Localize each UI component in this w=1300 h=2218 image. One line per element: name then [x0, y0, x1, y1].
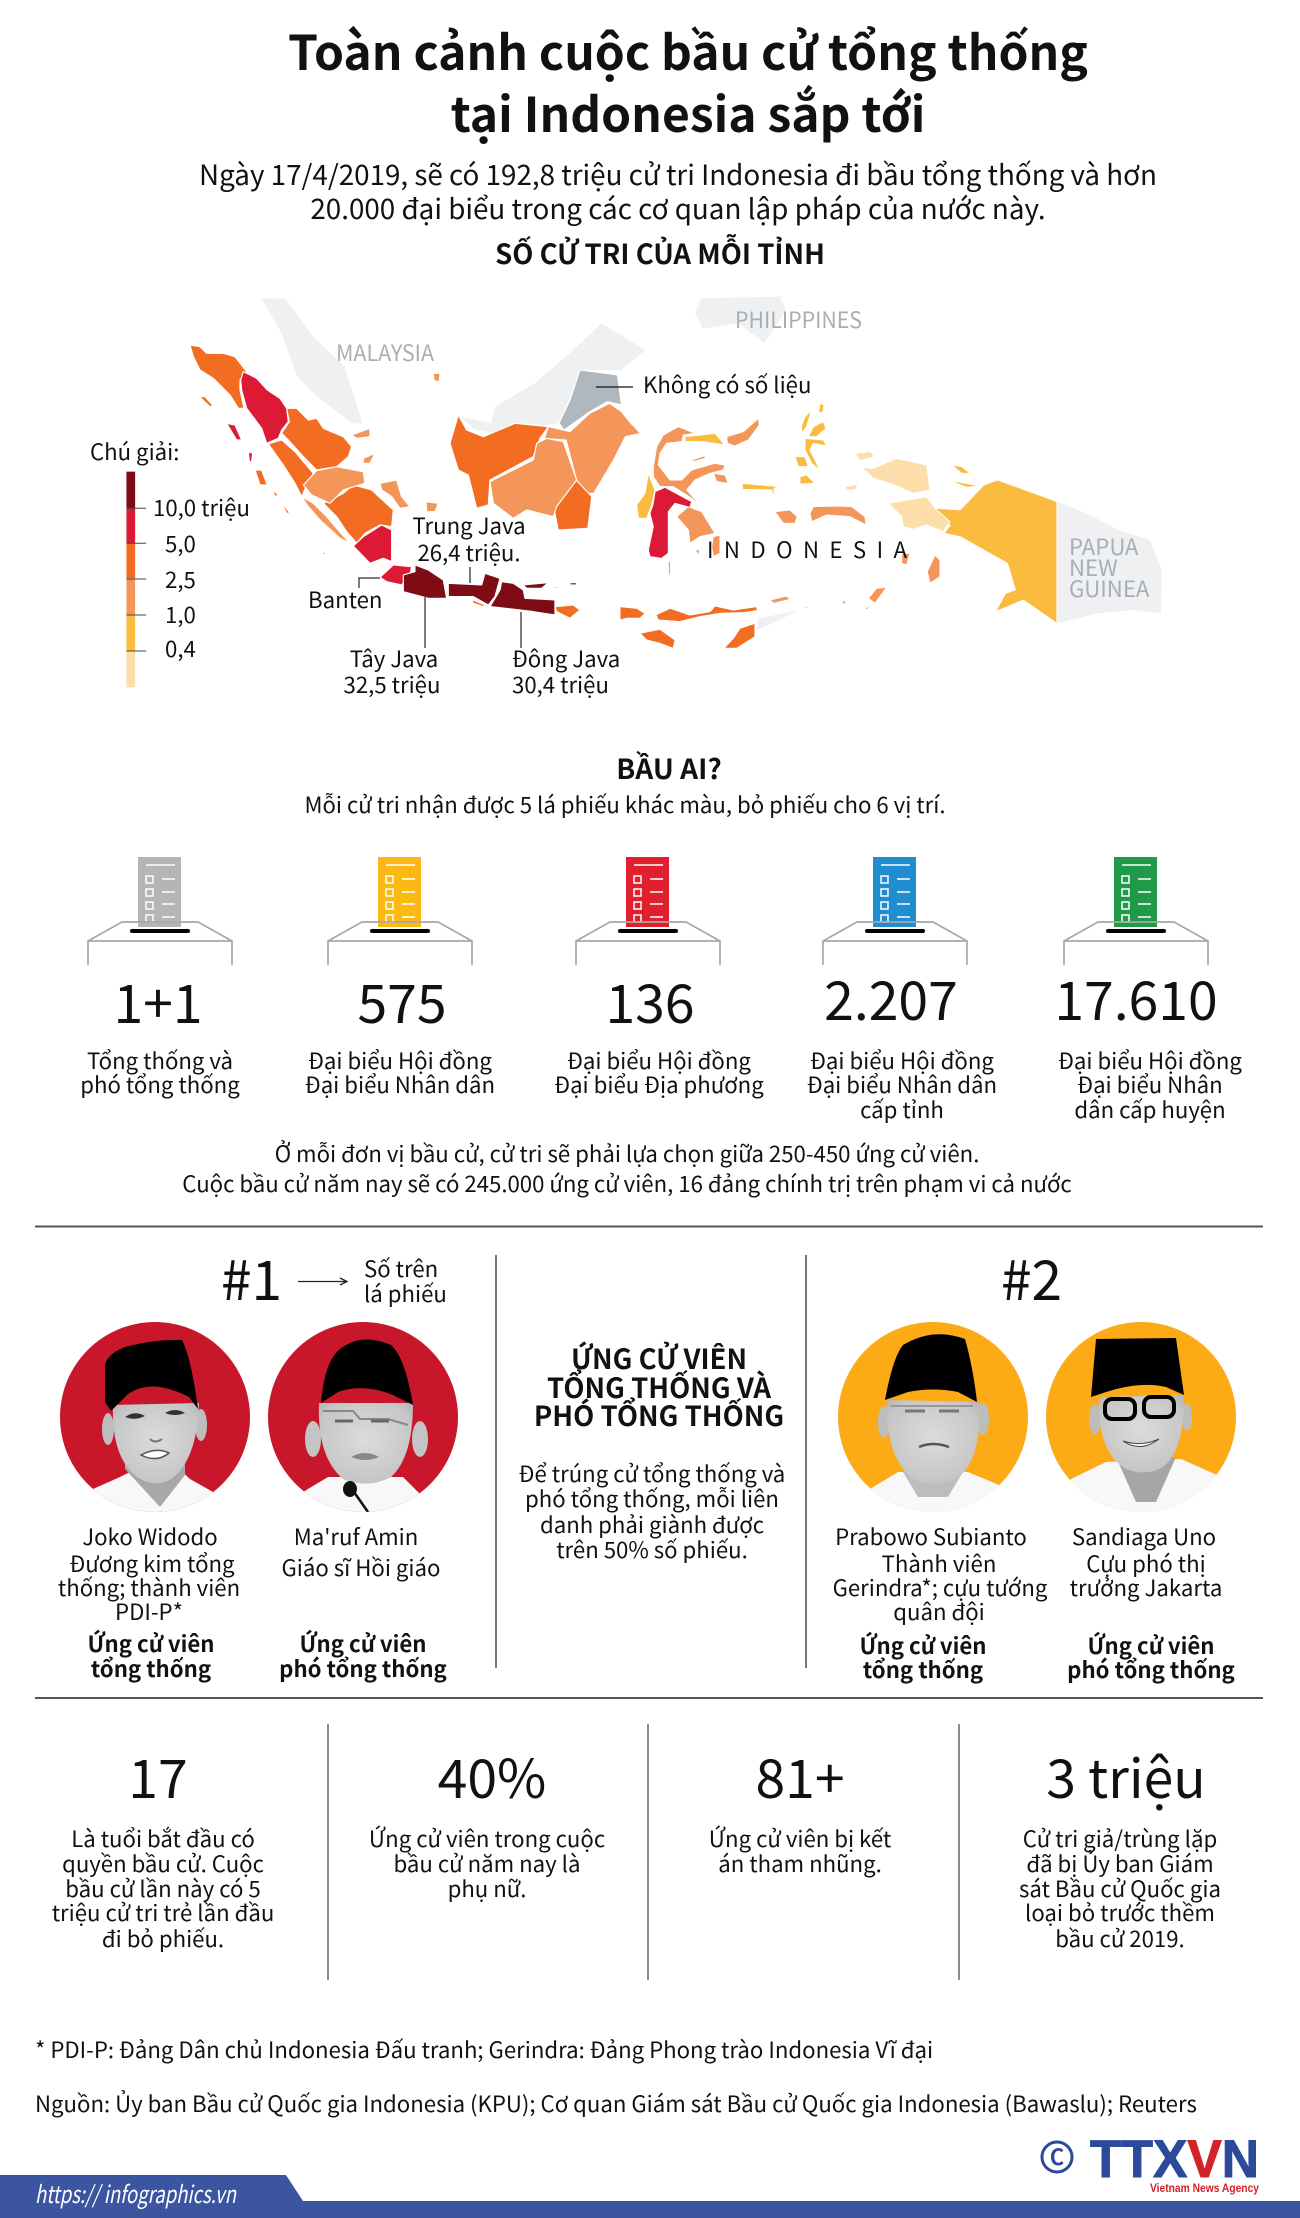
candidates summary text: Cuộc bầu cử năm nay sẽ có 245.000 ứng cử viên, 16 đảng chính trị trên phạm vi cả nước — [182, 1167, 1072, 1199]
stat: women candidates: Ứng cử viên trong cuộc — [369, 1822, 605, 1854]
portrait: Prabowo Subianto — [838, 1322, 1028, 1517]
candidates explainer: ỨNG CỬ VIÊN — [571, 1337, 747, 1377]
candidate: Joko Widodo: thống; thành viên — [58, 1571, 240, 1603]
stat: convicted candidates: Ứng cử viên bị kết — [709, 1822, 892, 1854]
candidate: Sandiaga Uno: Cựu phó thị — [1086, 1547, 1206, 1579]
label: Central Java — [412, 509, 526, 583]
candidate: Prabowo Subianto — [833, 1520, 1048, 1685]
ballot column: regional assembly — [554, 857, 764, 1100]
country labels: PAPUA — [1069, 530, 1139, 562]
candidate: Sandiaga Uno: Ứng cử viên — [1087, 1629, 1215, 1661]
title: Toàn cảnh cuộc bầu cử tổng thống — [288, 14, 1088, 84]
source: Nguồn: Ủy ban Bầu cử Quốc gia Indonesia (KPU); Cơ quan Giám sát Bầu cử Quốc gia Indonesia (Bawaslu); Reuters — [35, 2087, 1197, 2119]
Papua province — [932, 480, 1057, 623]
country labels: GUINEA — [1069, 572, 1150, 604]
stat: voting age: triệu cử tri trẻ lần đầu — [52, 1896, 274, 1928]
ballot column: president: 1+1 — [113, 962, 203, 1039]
candidate: Prabowo Subianto: Gerindra*; cựu tướng — [833, 1571, 1048, 1603]
stat: convicted candidates: án tham nhũng. — [718, 1847, 882, 1879]
map: Indonesia voters by province — [90, 297, 1162, 700]
candidates explainer: trên 50% số phiếu. — [556, 1533, 748, 1565]
intro text: Ngày 17/4/2019, sẽ có 192,8 triệu cử tri Indonesia đi bầu tổng thống và hơn — [199, 154, 1157, 194]
map legend: 2,5 — [165, 563, 196, 595]
stat: voting age — [52, 1737, 274, 1954]
stat: voting age: quyền bầu cử. Cuộc — [62, 1847, 264, 1879]
candidate: Joko Widodo: tổng thống — [91, 1652, 211, 1684]
icon: green ballot — [1064, 857, 1208, 965]
ballot column: regional assembly: Đại biểu Hội đồng — [567, 1044, 751, 1076]
label: West Java — [344, 597, 440, 700]
country labels: PHILIPPINES — [735, 303, 862, 335]
candidate: Ma'ruf Amin: Ma'ruf Amin — [294, 1520, 418, 1552]
portrait: Sandiaga Uno — [1046, 1322, 1236, 1517]
candidate: Prabowo Subianto: quân đội — [893, 1595, 985, 1627]
ballot column: district: dân cấp huyện — [1074, 1093, 1226, 1125]
map legend: 0,4 — [165, 632, 196, 664]
candidate: Prabowo Subianto: Thành viên — [882, 1547, 996, 1579]
ballot column: provincial: Đại biểu Hội đồng — [810, 1044, 994, 1076]
ticket number 2: #2 — [1001, 1236, 1062, 1316]
logo: TTXVN: Vietnam News Agency — [1150, 2181, 1259, 2195]
label: Indonesia: INDONESIA — [707, 533, 908, 565]
candidate: Ma'ruf Amin: phó tổng thống — [279, 1652, 447, 1684]
intro text: 20.000 đại biểu trong các cơ quan lập pháp của nước này. — [310, 188, 1046, 228]
eastern Indonesia provinces — [620, 403, 980, 648]
footer bar: https:// infographics.vn — [35, 2175, 237, 2210]
candidate: Sandiaga Uno: trưởng Jakarta — [1070, 1571, 1222, 1603]
map legend — [90, 435, 250, 687]
ballot column: provincial: cấp tỉnh — [860, 1093, 944, 1125]
arrow — [298, 1278, 347, 1285]
candidate: Sandiaga Uno: phó tổng thống — [1067, 1653, 1235, 1685]
icon: yellow ballot — [328, 857, 472, 965]
ballot column: district: 17.610 — [1054, 959, 1218, 1036]
candidates explainer — [519, 1337, 785, 1565]
ballot column: district — [1054, 857, 1242, 1125]
ballot column: national assembly — [305, 857, 495, 1100]
ballot column: provincial: 2.207 — [824, 959, 958, 1036]
candidate: Joko Widodo: Joko Widodo — [82, 1520, 218, 1552]
stat: removed voters: đã bị Ủy ban Giám — [1026, 1847, 1214, 1879]
stat: voting age: đi bỏ phiếu. — [102, 1922, 224, 1954]
northern, eastern and southern Kalimantan — [544, 370, 640, 530]
map legend: Chú giải: — [90, 435, 179, 467]
western Indonesia provinces — [190, 345, 580, 618]
candidates explainer: Để trúng cử tổng thống và — [519, 1457, 785, 1489]
footer bar — [0, 2175, 1300, 2218]
neighbouring countries — [262, 297, 1162, 630]
stat: removed voters: 3 triệu — [1046, 1737, 1206, 1814]
stat: women candidates — [369, 1737, 605, 1904]
section subheading: Mỗi cử tri nhận được 5 lá phiếu khác màu, bỏ phiếu cho 6 vị trí. — [304, 788, 946, 820]
label: East Java: 30,4 triệu — [512, 668, 609, 700]
ballot column: regional assembly: Đại biểu Địa phương — [554, 1068, 764, 1100]
logo: TTXVN: C — [1050, 2140, 1064, 2172]
section heading: who to vote: BẦU AI? — [616, 748, 722, 788]
stat: removed voters — [1019, 1737, 1221, 1954]
ballot column: district: Đại biểu Hội đồng — [1058, 1044, 1242, 1076]
candidate: Ma'ruf Amin — [279, 1520, 447, 1684]
candidates explainer: phó tổng thống, mỗi liên — [525, 1482, 779, 1514]
label: Banten: Banten — [308, 583, 382, 615]
candidate: Ma'ruf Amin: Ứng cử viên — [299, 1627, 427, 1659]
label: no data callout: Không có số liệu — [643, 368, 811, 400]
stat: removed voters: Cử tri giả/trùng lặp — [1023, 1822, 1217, 1854]
ballot number note: Số trên — [364, 1252, 438, 1284]
country labels: MALAYSIA — [336, 336, 434, 368]
stat: removed voters: loại bỏ trước thềm — [1025, 1896, 1215, 1928]
candidate: Joko Widodo: Đương kim tổng — [69, 1547, 235, 1579]
stat: removed voters: bầu cử 2019. — [1055, 1922, 1185, 1954]
stat: voting age: Là tuổi bắt đầu có — [71, 1822, 255, 1854]
label: West Java: Tây Java — [350, 642, 438, 674]
stat: voting age: bầu cử lần này có 5 — [65, 1872, 261, 1904]
ballot column: national assembly: 575 — [357, 962, 447, 1039]
candidate: Prabowo Subianto: tổng thống — [863, 1653, 983, 1685]
candidate: Prabowo Subianto: Prabowo Subianto — [835, 1520, 1027, 1552]
map legend: 10,0 triệu — [153, 491, 250, 523]
stat: convicted candidates: 81+ — [755, 1737, 845, 1814]
candidate: Joko Widodo: PDI-P* — [115, 1595, 183, 1627]
candidate: Ma'ruf Amin: Giáo sĩ Hồi giáo — [282, 1551, 440, 1583]
ballot column: provincial — [807, 857, 997, 1125]
ballot column: president: phó tổng thống — [80, 1068, 240, 1100]
ballot column: provincial: Đại biểu Nhân dân — [807, 1068, 997, 1100]
country labels: NEW — [1069, 551, 1118, 583]
ballot column: national assembly: Đại biểu Nhân dân — [305, 1068, 495, 1100]
icon: grey ballot — [88, 857, 232, 965]
ticket number 1: #1 — [221, 1236, 282, 1316]
portrait: Ma'ruf Amin — [268, 1322, 458, 1517]
ballot column: president — [80, 857, 240, 1100]
map legend: 1,0 — [165, 598, 196, 630]
icon: blue ballot — [823, 857, 967, 965]
stat: convicted candidates — [709, 1737, 892, 1879]
candidate: Sandiaga Uno — [1067, 1520, 1235, 1685]
ballot number note: lá phiếu — [364, 1277, 447, 1309]
candidate: Prabowo Subianto: Ứng cử viên — [859, 1629, 987, 1661]
ballot column: president: Tổng thống và — [87, 1044, 233, 1076]
map legend: 5,0 — [165, 527, 196, 559]
footnote: * PDI-P: Đảng Dân chủ Indonesia Đấu tranh; Gerindra: Đảng Phong trào Indonesia Vĩ đại — [35, 2033, 933, 2065]
candidates explainer: TỔNG THỐNG VÀ — [547, 1366, 771, 1406]
logo: TTXVN: TTXVN — [1090, 2130, 1259, 2189]
stat: voting age: 17 — [128, 1737, 188, 1814]
title: tại Indonesia sắp tới — [451, 76, 925, 146]
icon: red ballot — [576, 857, 720, 965]
label: East Java: Đông Java — [512, 642, 620, 674]
label: Central Java: Trung Java — [412, 509, 526, 541]
label: West Java: 32,5 triệu — [344, 668, 440, 700]
candidates explainer: danh phải giành được — [540, 1508, 764, 1540]
stat: women candidates: bầu cử năm nay là — [394, 1847, 580, 1879]
candidate: Sandiaga Uno: Sandiaga Uno — [1072, 1520, 1216, 1552]
stat: women candidates: phụ nữ. — [448, 1872, 526, 1904]
label: East Java — [512, 612, 620, 700]
ballot column: national assembly: Đại biểu Hội đồng — [308, 1044, 492, 1076]
candidates summary text: Ở mỗi đơn vị bầu cử, cử tri sẽ phải lựa chọn giữa 250-450 ứng cử viên. — [275, 1137, 979, 1169]
label: Central Java: 26,4 triệu. — [417, 536, 521, 568]
stat: removed voters: sát Bầu cử Quốc gia — [1019, 1872, 1221, 1904]
stat: women candidates: 40% — [438, 1737, 546, 1814]
candidates explainer: PHÓ TỔNG THỐNG — [534, 1394, 784, 1434]
map heading: SỐ CỬ TRI CỦA MỖI TỈNH — [495, 232, 825, 272]
ballot column: district: Đại biểu Nhân — [1077, 1068, 1223, 1100]
ballot column: regional assembly: 136 — [605, 962, 695, 1039]
country labels — [336, 303, 1150, 604]
candidate: Joko Widodo — [58, 1520, 240, 1684]
candidate: Joko Widodo: Ứng cử viên — [87, 1627, 215, 1659]
portrait: Joko Widodo — [60, 1322, 250, 1517]
